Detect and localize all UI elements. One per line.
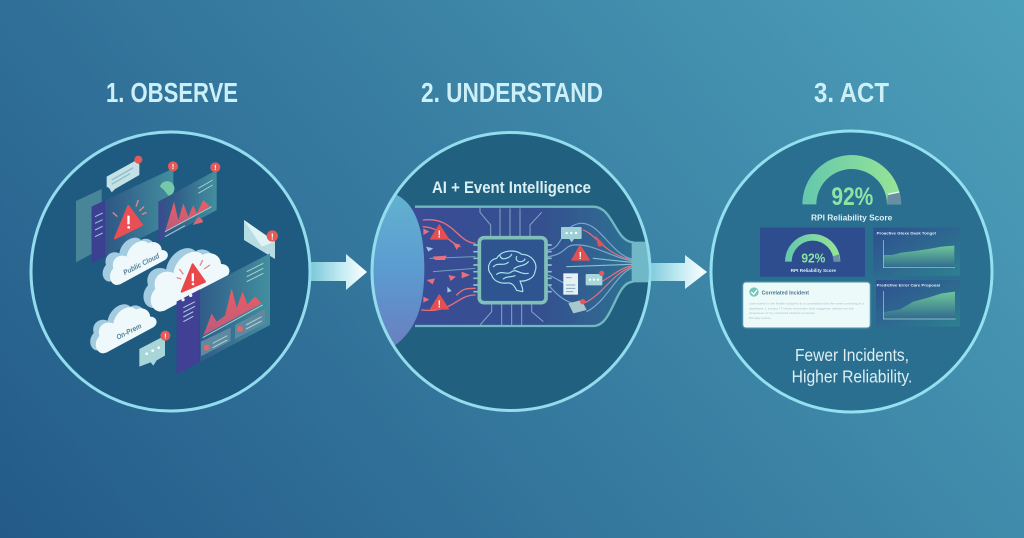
sidebar panel: [76, 189, 102, 262]
large score value: 92%: [831, 183, 873, 211]
heading: 1. OBSERVE: 1. OBSERVE: [106, 77, 238, 108]
arrow: observe to understand: [311, 254, 367, 290]
chat bubble alert: [139, 331, 170, 367]
chart panel: bottom: [876, 280, 960, 327]
heading: 3. ACT: 3. ACT: [814, 77, 889, 108]
envelope alert: [244, 220, 278, 259]
panel: observe circle: [31, 132, 310, 411]
icon: brain: [489, 251, 536, 292]
card: correlated incident: response or by resolved shared property: [749, 311, 816, 315]
card: correlated incident: Correlated Incident: [762, 291, 809, 297]
card: correlated incident: Primary source: [749, 316, 771, 320]
main alert dashboard: [92, 161, 178, 263]
card: correlated incident: [743, 283, 870, 327]
panel: understand circle: [360, 132, 650, 410]
main alert dashboard: !: [172, 162, 174, 171]
cloud: public cloud: Public Cloud: [122, 251, 161, 277]
small gauge panel: [760, 228, 865, 277]
outgoing event icons: !: [579, 251, 582, 262]
small gauge panel: 92%: [801, 250, 825, 265]
funnel intake: [374, 195, 424, 346]
chart dashboard: !: [214, 163, 217, 172]
large gauge: [802, 155, 902, 204]
AI chip with brain: [473, 238, 552, 303]
label: AI + Event Intelligence: AI + Event Intelligence: [432, 179, 591, 197]
incoming event fragments: [423, 225, 470, 311]
incoming event fragments: !: [438, 230, 441, 241]
outgoing streams: [548, 223, 632, 312]
heading: 2. UNDERSTAND: 2. UNDERSTAND: [421, 77, 603, 108]
chart panel: top: [873, 228, 960, 276]
arrow: understand to act: [648, 255, 707, 289]
incoming alert streams: [422, 220, 475, 310]
output connector: [632, 242, 648, 282]
cloud: public cloud: [103, 238, 168, 285]
outgoing event icons: [561, 227, 605, 313]
ring: [372, 132, 650, 410]
card: correlated incident: database 1 impact IT issue resolution that suggests narrow on the: [749, 306, 854, 310]
chat bubble alert: !: [164, 331, 167, 340]
incoming event fragments: !: [438, 300, 441, 311]
chart panel: bottom: Predictive Error Care Proposal: [877, 283, 940, 287]
panel: act circle: [711, 131, 992, 412]
large chart dashboard: [177, 253, 270, 374]
chart panel: top: Proactive Gloxe Dask Tonget: [877, 231, 937, 235]
processing tube: [410, 207, 633, 326]
closing statement: Fewer Incidents,: [795, 345, 909, 365]
act contents: [743, 155, 960, 387]
speech bubble alert: [107, 156, 142, 192]
card: correlated incident: Last noted in the health footprint is a correlation tied the event pending in a: [749, 301, 865, 305]
cloud: on-prem: On-Prem: [115, 321, 143, 342]
closing statement: [792, 345, 912, 387]
small gauge panel: RPI Reliability Score: [791, 268, 836, 273]
isometric illustration: clouds and dashboards: [76, 156, 278, 374]
closing statement: Higher Reliability.: [792, 367, 912, 387]
large gauge label: RPI Reliability Score: [811, 212, 893, 222]
cloud: on-prem: [90, 304, 157, 353]
funnel pipeline illustration: [360, 193, 648, 347]
cloud: alert cloud: [143, 248, 229, 312]
envelope alert: !: [271, 231, 274, 241]
chart dashboard: [158, 162, 220, 242]
